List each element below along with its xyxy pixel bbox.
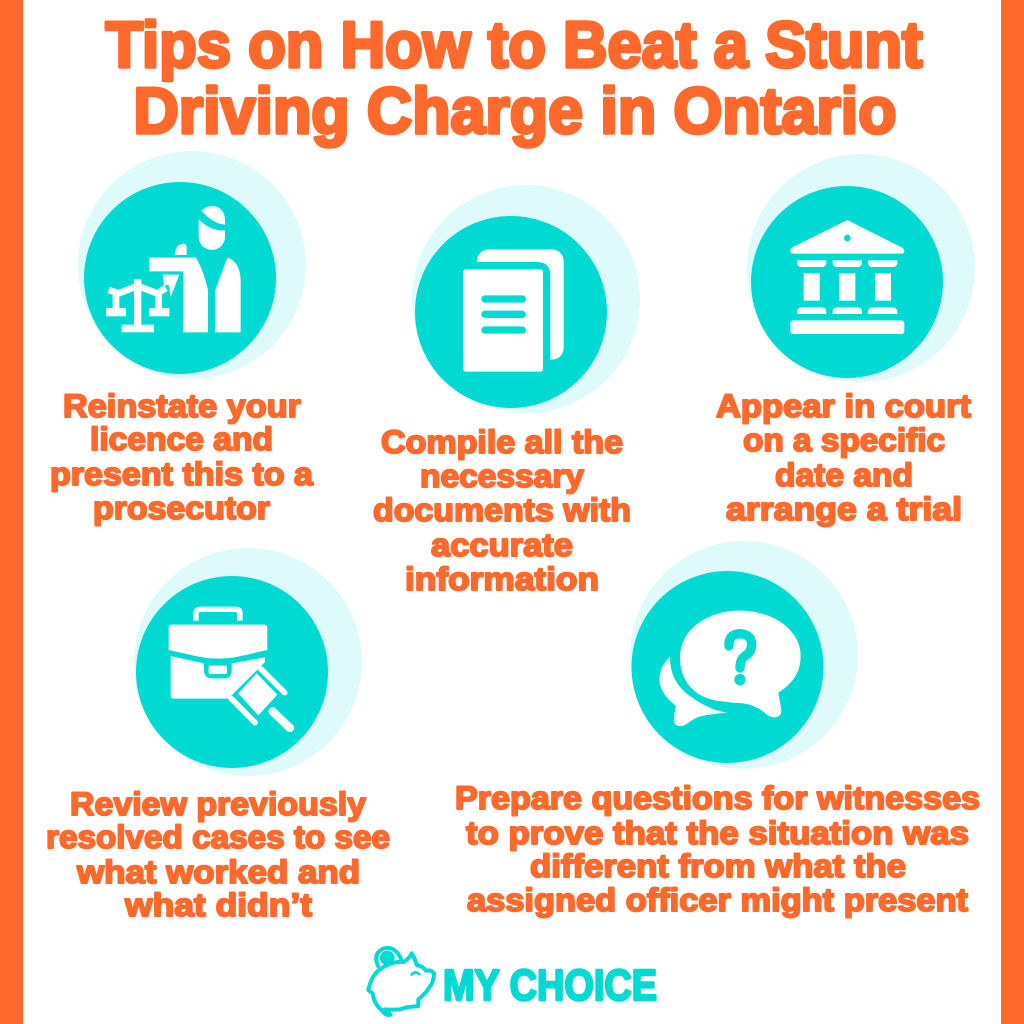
tip 1 text: present this to a [50, 456, 313, 492]
right border [1001, 0, 1024, 1024]
logo: My Choice piggy bank [368, 948, 657, 1015]
title: Tips on How to Beat a Stunt [106, 8, 922, 81]
left border [0, 0, 23, 1024]
panel: tip 4 icon, briefcase and gavel [134, 548, 362, 776]
panel: tip 5 icon, speech bubbles with question mark [630, 541, 858, 769]
tip 5 text: assigned officer might present [467, 882, 968, 918]
tip 1 text: Reinstate your [63, 388, 301, 424]
tip 1 text: prosecutor [93, 490, 270, 526]
tip 3 text: on a specific [743, 422, 945, 458]
panel: tip 3 icon, courthouse [747, 154, 975, 382]
tip 2 text: accurate [431, 527, 573, 563]
tip 5 text: different from what the [530, 848, 906, 884]
tip 4 text: resolved cases to see [46, 819, 390, 855]
tip 2 text: necessary [420, 458, 584, 494]
tip 4 text: what didn’t [124, 887, 312, 923]
tip 4 text: what worked and [76, 854, 360, 890]
tip 5 text: to prove that the situation was [466, 815, 969, 851]
tip 2 text [373, 424, 631, 597]
tip 3 text: arrange a trial [726, 491, 962, 527]
tip 1 text: licence and [90, 421, 273, 457]
tip 5 text [455, 780, 980, 918]
tip 4 text: Review previously [70, 786, 366, 822]
tip 4 text [46, 786, 390, 923]
tip 3 text [716, 388, 971, 527]
tip 2 text: Compile all the [381, 424, 623, 460]
title [106, 8, 922, 147]
tip 2 text: documents with [373, 492, 631, 528]
logo: My Choice piggy bank: MY CHOICE [443, 961, 657, 1010]
panel: tip 2 icon, documents [412, 185, 640, 413]
tip 1 text [50, 388, 313, 526]
panel: tip 1 icon, lawyer and scales [78, 151, 306, 379]
tip 2 text: information [405, 561, 599, 597]
tip 3 text: Appear in court [716, 388, 971, 424]
title: Driving Charge in Ontario [134, 74, 896, 147]
tip 5 text: Prepare questions for witnesses [455, 780, 980, 816]
tip 3 text: date and [775, 457, 913, 493]
